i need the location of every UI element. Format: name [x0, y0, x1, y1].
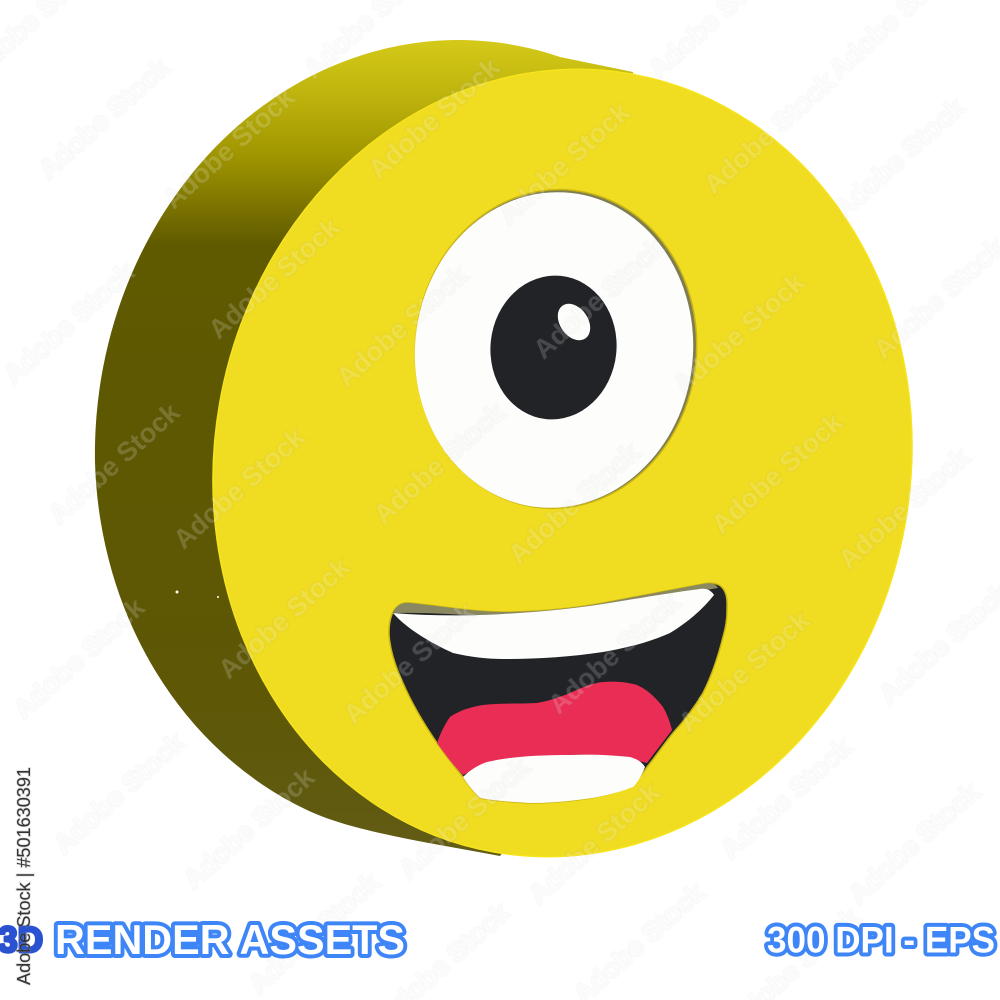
- watermark pattern: Adobe Stock: [706, 406, 849, 540]
- watermark pattern: Adobe Stock: [338, 596, 481, 730]
- watermark pattern: Adobe Stock: [178, 761, 321, 895]
- pupil highlight: [551, 298, 597, 346]
- eye socket shadow: [400, 176, 712, 522]
- eye: [399, 176, 712, 522]
- mouth rim shadow: [393, 583, 718, 616]
- watermark pattern: Adobe Stock: [668, 266, 811, 400]
- watermark pattern: Adobe Stock: [368, 396, 511, 530]
- mouth cavity: [389, 583, 727, 803]
- eye white: [399, 178, 709, 522]
- lower teeth: [463, 755, 645, 803]
- watermark pattern: Adobe Stock: [543, 586, 686, 720]
- disc side wall: [95, 40, 700, 856]
- watermark pattern: Adobe Stock: [673, 604, 816, 738]
- mouth: [389, 583, 727, 803]
- watermark pattern: Adobe Stock: [493, 96, 636, 230]
- watermark pattern: Adobe Stock: [0, 256, 141, 390]
- watermark pattern: Adobe Stock: [158, 81, 301, 215]
- watermark pattern: Adobe Stock: [243, 866, 386, 1000]
- watermark pattern: Adobe Stock: [698, 66, 841, 200]
- watermark pattern: Adobe Stock: [843, 776, 986, 910]
- watermark pattern: Adobe Stock: [213, 551, 356, 685]
- watermark pattern: Adobe Stock: [363, 51, 506, 185]
- watermark pattern: Adobe Stock: [203, 211, 346, 345]
- pupil: [483, 269, 624, 426]
- watermark pattern: Adobe Stock: [393, 751, 536, 885]
- watermark pattern: Adobe Stock: [528, 231, 671, 365]
- watermark pattern: Adobe Stock: [715, 731, 858, 865]
- tongue: [437, 682, 672, 775]
- watermark pattern: Adobe Stock: [331, 259, 474, 393]
- disc face: [151, 14, 974, 912]
- stock id: Adobe Stock | #501630391: [14, 767, 34, 985]
- watermark pattern: Adobe Stock: [8, 591, 151, 725]
- label: render assets: RENDER ASSETS: [55, 916, 405, 963]
- side wall specks: [176, 590, 219, 598]
- icon: cyclops emoji: [95, 14, 974, 912]
- watermark pattern: Adobe Stock: [168, 421, 311, 555]
- watermark pattern: Adobe Stock: [503, 436, 646, 570]
- watermark pattern: Adobe Stock: [48, 726, 191, 860]
- watermark pattern: Adobe Stock: [828, 91, 971, 225]
- watermark pattern: Adobe Stock: [523, 776, 666, 910]
- watermark pattern: Adobe Stock: [33, 51, 176, 185]
- upper teeth: [393, 589, 714, 659]
- watermark pattern: Adobe Stock: [43, 396, 186, 530]
- watermark pattern: Adobe Stock: [833, 441, 976, 575]
